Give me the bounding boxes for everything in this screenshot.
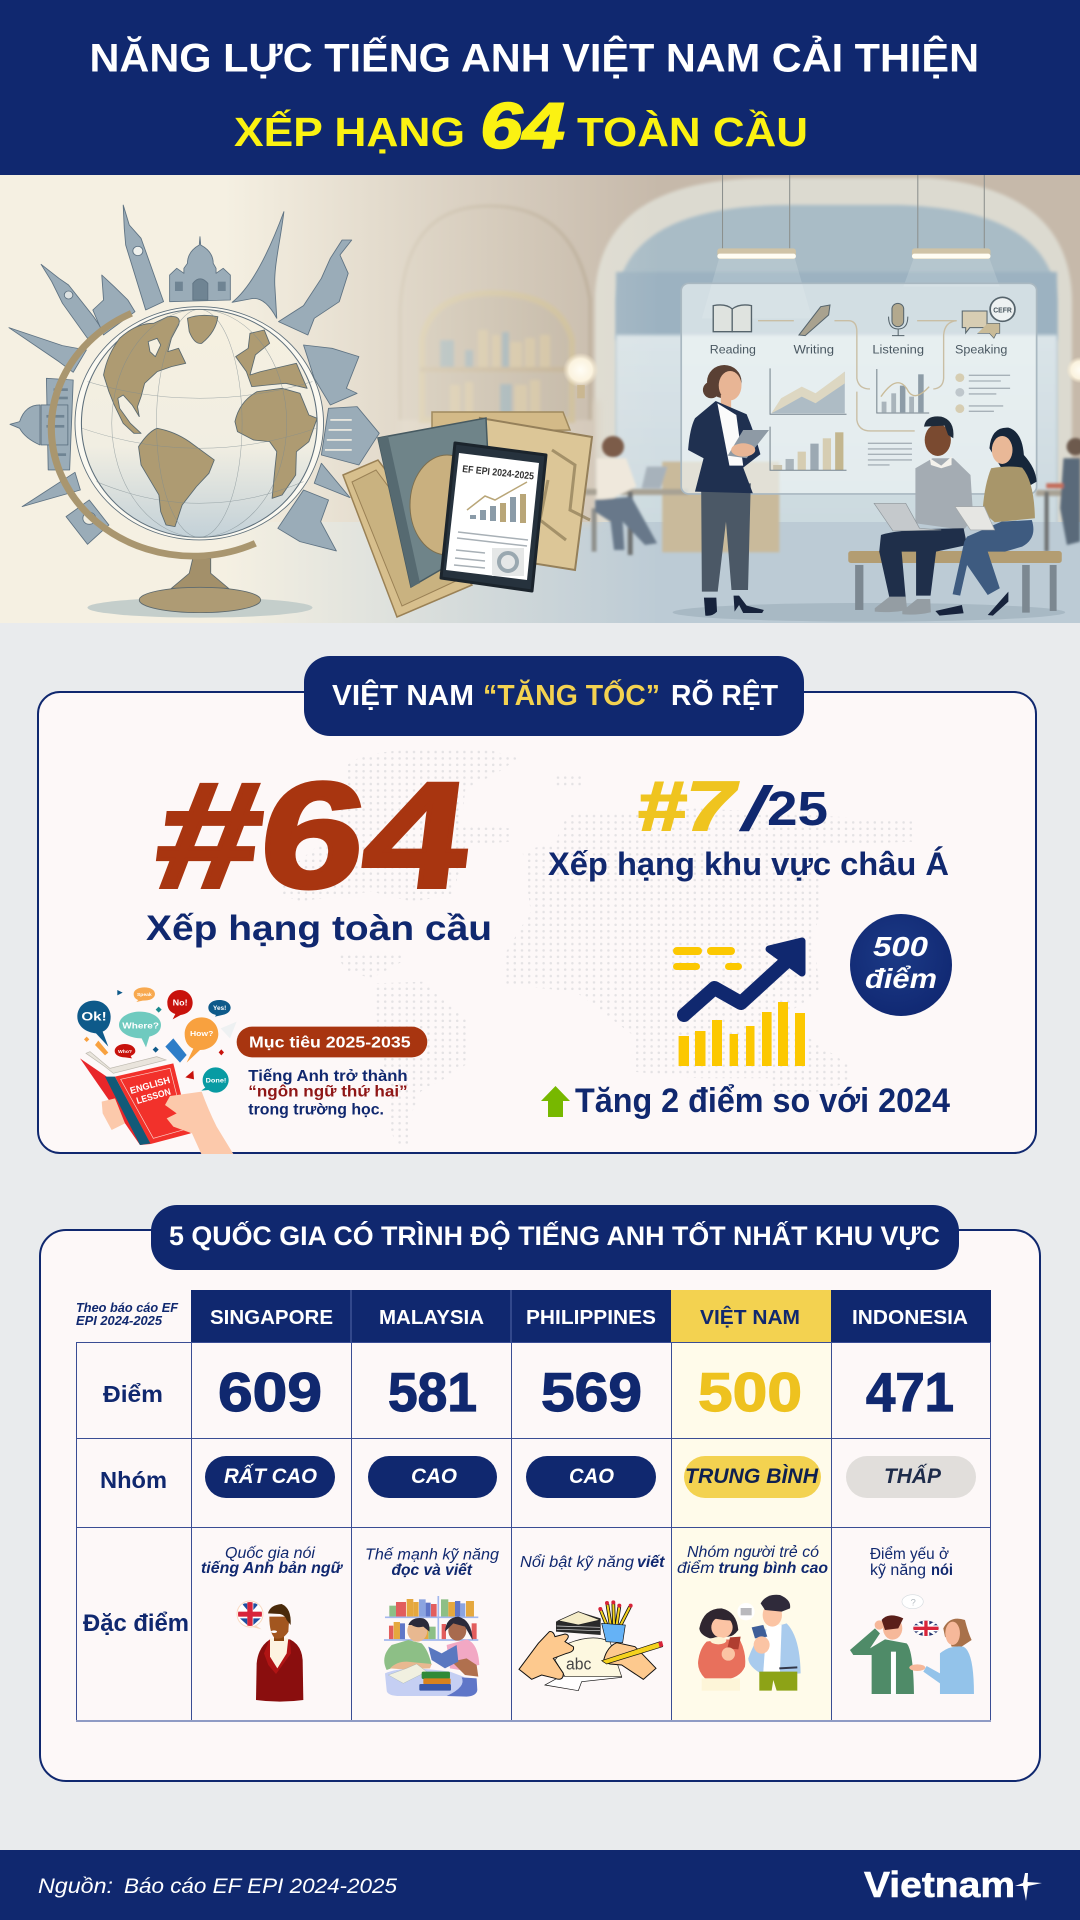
group pills: THẤP xyxy=(884,1464,942,1488)
group pills: CAO xyxy=(411,1465,457,1488)
speech bubbles: How? xyxy=(190,1029,214,1038)
section 2 heading: 5 QUỐC GIA CÓ TRÌNH ĐỘ TIẾNG ANH TỐT NHẤT KHU VỰC xyxy=(169,1219,940,1251)
icon: students reading xyxy=(384,1596,479,1697)
source note: Theo báo cáo EF xyxy=(76,1301,178,1315)
characteristic text: Thế mạnh kỹ năng xyxy=(365,1546,499,1564)
section 1 heading: “TĂNG TỐC” xyxy=(483,678,660,712)
source note xyxy=(76,1301,178,1328)
hanging lamps xyxy=(702,175,1000,318)
green up arrow xyxy=(541,1086,570,1117)
text lines on board xyxy=(868,443,912,465)
icon: conversation xyxy=(850,1595,974,1694)
asia rank number: #7 xyxy=(637,767,739,845)
landmarks xyxy=(9,205,379,551)
section 2 heading xyxy=(151,1205,959,1270)
title line 2 xyxy=(234,89,808,162)
list block xyxy=(955,373,1010,413)
row labels: Điểm xyxy=(103,1381,163,1407)
globe sphere xyxy=(75,307,324,540)
target text: trong trường học. xyxy=(248,1101,384,1118)
room background xyxy=(0,175,1080,623)
target text: Tiếng Anh trở thành xyxy=(248,1068,408,1085)
title line 1: NĂNG LỰC TIẾNG ANH VIỆT NAM CẢI THIỆN xyxy=(90,34,979,80)
target pill xyxy=(237,1027,427,1057)
small decorations xyxy=(84,990,237,1079)
right map xyxy=(480,418,592,570)
speech bubbles: No! xyxy=(173,998,188,1008)
global rank label: Xếp hạng toàn cầu xyxy=(146,909,492,948)
500 points badge: điểm xyxy=(865,963,937,994)
illustrations left pair xyxy=(237,1596,479,1702)
group pills xyxy=(205,1456,976,1498)
icon: conversation: ? xyxy=(911,1597,916,1607)
characteristic text: Điểm yếu ở xyxy=(870,1546,949,1563)
dotted world map xyxy=(280,745,920,1150)
open book: LESSON xyxy=(135,1086,172,1106)
illustrations right trio xyxy=(519,1595,974,1694)
connector lines xyxy=(758,321,957,431)
footer bar xyxy=(0,1850,1080,1920)
icon: writing hand xyxy=(519,1600,663,1691)
global rank number: #64 xyxy=(148,752,479,919)
skill icons and labels xyxy=(710,297,1015,356)
bookshelf alcove xyxy=(400,206,590,420)
landmarks ring and globe xyxy=(9,205,379,618)
english book illustration and target xyxy=(77,987,427,1154)
atlas book xyxy=(378,418,492,587)
icon: writing hand: abc xyxy=(566,1654,591,1673)
group pills: TRUNG BÌNH xyxy=(685,1465,819,1488)
asia rank number xyxy=(637,767,828,845)
row labels xyxy=(83,1381,189,1637)
area chart xyxy=(770,368,847,414)
title line 2: TOÀN CẦU xyxy=(577,109,808,155)
asia rank number: / xyxy=(738,775,774,844)
open book xyxy=(80,1052,191,1145)
globe graticule xyxy=(82,309,316,537)
section 1 heading: RÕ RỆT xyxy=(671,678,778,712)
skill icons and labels: Listening xyxy=(872,342,924,356)
score numbers xyxy=(218,1361,954,1423)
characteristic text: điểm xyxy=(677,1560,715,1577)
globe meridian frame xyxy=(51,313,255,556)
increase note: Tăng 2 điểm so với 2024 xyxy=(575,1082,950,1120)
open book: ENGLISH xyxy=(129,1075,172,1096)
presentation board and people xyxy=(673,283,1065,622)
characteristic text: Nhóm người trẻ có xyxy=(687,1544,819,1561)
score numbers: 471 xyxy=(866,1361,954,1423)
target pill: Mục tiêu 2025-2035 xyxy=(249,1034,411,1051)
source note: EPI 2024-2025 xyxy=(76,1314,163,1328)
asia rank label: Xếp hạng khu vực châu Á xyxy=(548,846,949,882)
seated man xyxy=(874,416,973,615)
characteristic text: Nổi bật kỹ năng xyxy=(520,1554,634,1571)
icon: native speaker xyxy=(237,1601,303,1702)
skill icons and labels: Speaking xyxy=(955,342,1007,356)
score numbers: 609 xyxy=(218,1361,322,1423)
group pills: CAO xyxy=(569,1465,614,1488)
section 1 card xyxy=(38,656,1036,1154)
hand holding book xyxy=(102,1092,233,1154)
500 points badge xyxy=(850,914,952,1016)
section 1 heading xyxy=(304,656,804,736)
country headers xyxy=(191,1290,991,1342)
antique maps, atlas and tablet xyxy=(343,412,592,617)
highlight column Vietnam xyxy=(671,1342,831,1721)
rising chart icon xyxy=(673,941,805,1066)
globe stand xyxy=(87,558,312,618)
comparison table xyxy=(76,1290,991,1721)
country headers: PHILIPPINES xyxy=(526,1307,656,1329)
speech bubbles: Who? xyxy=(118,1049,132,1055)
score numbers: 581 xyxy=(388,1361,477,1423)
header banner xyxy=(0,0,1080,175)
brand logo: Vietnam xyxy=(864,1864,1015,1905)
floor shadow xyxy=(673,603,1065,622)
bar chart xyxy=(770,427,847,470)
asia rank number: 25 xyxy=(767,783,828,836)
country headers: SINGAPORE xyxy=(210,1307,333,1329)
row labels: Nhóm xyxy=(100,1467,167,1493)
skill icons and labels: CEFR xyxy=(993,305,1012,314)
continents xyxy=(104,315,317,527)
speech bubbles: Done! xyxy=(206,1078,226,1085)
country headers: INDONESIA xyxy=(852,1307,968,1329)
bench xyxy=(848,551,1062,613)
country headers: VIỆT NAM xyxy=(700,1305,800,1329)
characteristic text: tiếng Anh bản ngữ xyxy=(201,1560,344,1577)
score numbers: 569 xyxy=(541,1361,642,1423)
title line 2: 64 xyxy=(480,89,565,162)
score numbers: 500 xyxy=(698,1361,802,1423)
characteristic text: đọc và viết xyxy=(392,1562,473,1579)
speech bubbles xyxy=(77,987,231,1093)
back map xyxy=(432,412,570,432)
section 1 heading: VIỆT NAM xyxy=(332,678,474,712)
tablet xyxy=(441,443,546,591)
source: Nguồn: xyxy=(38,1875,113,1898)
seated woman xyxy=(935,428,1037,616)
country headers: MALAYSIA xyxy=(379,1307,484,1329)
skill icons and labels: Reading xyxy=(710,342,756,356)
target text: “ngôn ngữ thứ hai” xyxy=(248,1084,408,1101)
icon: young people with phones xyxy=(698,1595,801,1691)
speech bubbles: Ok! xyxy=(81,1010,107,1024)
characteristic text xyxy=(201,1544,953,1579)
group pills: RẤT CAO xyxy=(224,1464,317,1488)
left map xyxy=(343,460,472,617)
blurred background people and desk xyxy=(585,436,1080,555)
characteristic text: trung bình cao xyxy=(718,1560,828,1577)
characteristic text: nói xyxy=(931,1562,953,1579)
characteristic text: viết xyxy=(637,1554,665,1571)
left fade to cream xyxy=(0,175,660,623)
speech bubbles: Yes! xyxy=(213,1006,226,1012)
500 points badge: 500 xyxy=(873,931,929,962)
grid xyxy=(76,1342,991,1721)
glass board xyxy=(681,283,1037,494)
wall sconces xyxy=(563,353,1080,398)
section 2 card xyxy=(40,1205,1040,1781)
speech bubbles: Speak xyxy=(137,992,152,997)
speech bubbles: Where? xyxy=(122,1020,159,1030)
skill icons and labels: Writing xyxy=(793,342,834,356)
room furniture and lights xyxy=(563,175,1080,555)
row labels: Đặc điểm xyxy=(83,1610,189,1637)
target text xyxy=(248,1068,408,1118)
characteristic text: Quốc gia nói xyxy=(225,1545,316,1562)
characteristic text: kỹ năng xyxy=(870,1562,926,1579)
title line 2: XẾP HẠNG xyxy=(234,109,465,155)
source: Báo cáo EF EPI 2024-2025 xyxy=(124,1875,397,1898)
hero illustration xyxy=(0,175,1080,623)
standing woman xyxy=(688,365,769,616)
line and bar chart xyxy=(877,369,929,413)
tablet: EF EPI 2024-2025 xyxy=(462,464,535,483)
